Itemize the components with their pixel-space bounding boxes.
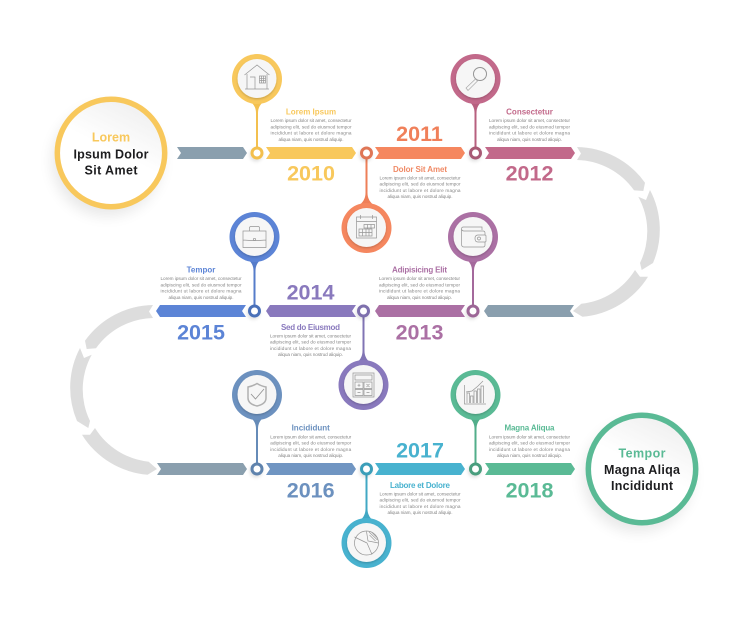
text block: adipiscing elit, sed do eiusmod tempor xyxy=(380,498,461,503)
bar 2017 xyxy=(375,463,465,475)
text block: incididunt ut labore et dolore magna xyxy=(380,504,461,509)
text block: Lorem ipsum dolor sit amet, consectetur xyxy=(489,434,570,439)
text block xyxy=(380,175,461,199)
text block xyxy=(270,434,352,458)
text block xyxy=(270,118,352,142)
text block: Lorem ipsum dolor sit amet, consectetur xyxy=(380,175,461,180)
text block: aliqua niam, quis nostrud aliquip. xyxy=(388,194,452,199)
start gray arrow bar xyxy=(177,147,247,159)
year: 2011 xyxy=(396,122,443,146)
milestone 2013 xyxy=(375,212,498,344)
node 2018 xyxy=(470,464,480,474)
start circle: Ipsum Dolor xyxy=(74,147,149,161)
bar 2010 xyxy=(266,147,356,159)
year: 2017 xyxy=(396,438,444,462)
milestone 2018 xyxy=(450,370,575,502)
text block: adipiscing elit, sed do eiusmod tempor xyxy=(270,441,352,446)
pin 2017 xyxy=(342,518,392,568)
text block: incididunt ut labore et dolore magna xyxy=(270,346,351,351)
stem 2018 xyxy=(468,417,483,463)
text block: incididunt ut labore et dolore magna xyxy=(379,288,460,294)
pin 2018 xyxy=(450,370,500,420)
year: 2014 xyxy=(287,280,334,304)
title: Labore et Dolore xyxy=(390,481,451,490)
year: 2012 xyxy=(506,162,553,186)
node 2011 xyxy=(362,148,372,158)
text block: aliqua niam, quis nostrud aliquip. xyxy=(388,510,452,515)
node 2012 xyxy=(470,148,480,158)
title: Dolor Sit Amet xyxy=(393,165,447,174)
icon: magnifier xyxy=(466,68,486,90)
milestone 2016 xyxy=(232,370,356,502)
bar 2018 xyxy=(485,463,575,475)
text block: aliqua niam, quis nostrud aliquip. xyxy=(278,352,343,357)
text block: incididunt ut labore et dolore magna xyxy=(270,130,352,136)
icon: shield xyxy=(248,384,266,406)
icon: house xyxy=(244,65,270,89)
title: Sed do Eiusmod xyxy=(281,323,340,332)
left connector arrows xyxy=(70,305,157,475)
pin 2016 xyxy=(232,370,282,420)
title: Adipisicing Elit xyxy=(392,266,447,274)
text block: Lorem ipsum dolor sit amet, consectetur xyxy=(380,491,461,496)
milestone 2012 xyxy=(450,54,575,186)
text block: adipiscing elit, sed do eiusmod tempor xyxy=(270,124,352,129)
start circle: Sit Amet xyxy=(84,163,138,177)
milestone 2015 xyxy=(156,212,280,344)
year: 2010 xyxy=(287,162,335,186)
start circle: Lorem xyxy=(92,131,130,145)
text block: incididunt ut labore et dolore magna xyxy=(380,188,461,193)
text block: adipiscing elit, sed do eiusmod tempor xyxy=(379,282,460,287)
return gray arrow bar xyxy=(484,305,574,317)
bar 2016 xyxy=(266,463,356,475)
title: Tempor xyxy=(187,266,215,274)
text block: Lorem ipsum dolor sit amet, consectetur xyxy=(270,333,351,338)
node 2017 xyxy=(362,464,372,474)
stem 2014 xyxy=(355,317,372,364)
text block: Lorem ipsum dolor sit amet, consectetur xyxy=(379,276,460,281)
title: Consectetur xyxy=(506,108,553,117)
node 2016 xyxy=(252,464,262,474)
lower gray arrow bar xyxy=(157,463,247,475)
icon: pie chart xyxy=(354,531,378,555)
stem 2010 xyxy=(249,101,265,147)
text block: aliqua niam, quis nostrud aliquip. xyxy=(278,137,344,142)
text block xyxy=(270,333,351,357)
pin 2011 xyxy=(342,203,392,253)
node 2010 xyxy=(252,148,262,158)
text block: Lorem ipsum dolor sit amet, consectetur xyxy=(270,434,352,439)
end circle: Tempor xyxy=(618,447,666,461)
stem 2012 xyxy=(468,101,483,147)
text block: Lorem ipsum dolor sit amet, consectetur xyxy=(160,276,242,281)
text block: adipiscing elit, sed do eiusmod tempor xyxy=(489,124,570,129)
text block xyxy=(160,276,242,300)
stem 2013 xyxy=(466,259,480,305)
end circle: Incididunt xyxy=(611,479,674,493)
node 2015 xyxy=(250,306,260,316)
year: 2016 xyxy=(287,478,335,502)
year: 2015 xyxy=(177,320,225,344)
end circle: Magna Aliqa xyxy=(604,463,681,477)
stem 2015 xyxy=(247,259,262,305)
bar 2011 xyxy=(375,147,465,159)
right connector arrows xyxy=(573,147,660,317)
title: Magna Aliqua xyxy=(504,424,555,432)
text block: incididunt ut labore et dolore magna xyxy=(160,288,242,294)
bar 2012 xyxy=(485,147,575,159)
text block xyxy=(380,491,461,515)
text block: adipiscing elit, sed do eiusmod tempor xyxy=(380,182,461,187)
title: Incididunt xyxy=(292,424,330,432)
text block xyxy=(379,276,460,300)
start circle xyxy=(52,99,165,216)
bar 2015 xyxy=(156,305,246,317)
text block: adipiscing elit, sed do eiusmod tempor xyxy=(489,441,570,446)
bar 2014 xyxy=(266,305,356,317)
text block: aliqua niam, quis nostrud aliquip. xyxy=(278,453,343,458)
text block: incididunt ut labore et dolore magna xyxy=(270,447,352,452)
milestone 2010 xyxy=(232,54,356,186)
stem 2016 xyxy=(250,417,264,463)
text block: Lorem ipsum dolor sit amet, consectetur xyxy=(489,118,570,123)
text block xyxy=(489,434,570,458)
icon: bar chart xyxy=(464,381,486,404)
pin 2015 xyxy=(230,212,280,262)
pin 2010 xyxy=(232,54,282,104)
year: 2018 xyxy=(506,478,553,502)
milestone 2017 xyxy=(342,438,465,568)
text block: aliqua niam, quis nostrud aliquip. xyxy=(168,295,234,300)
text block: Lorem ipsum dolor sit amet, consectetur xyxy=(270,118,352,123)
pin 2014 xyxy=(338,360,388,410)
end circle xyxy=(583,415,696,532)
text block xyxy=(489,118,570,142)
pin 2012 xyxy=(450,54,500,104)
milestone 2011 xyxy=(342,122,465,253)
icon: calculator xyxy=(353,373,374,397)
icon: briefcase xyxy=(243,226,266,248)
stem 2017 xyxy=(358,475,375,522)
stem 2011 xyxy=(358,159,375,206)
node 2013 xyxy=(468,306,478,316)
year: 2013 xyxy=(396,320,443,344)
text block: adipiscing elit, sed do eiusmod tempor xyxy=(270,340,351,345)
icon: calendar xyxy=(356,215,376,238)
text block: incididunt ut labore et dolore magna xyxy=(489,130,570,136)
node 2014 xyxy=(358,306,368,316)
text block: adipiscing elit, sed do eiusmod tempor xyxy=(160,282,242,287)
milestone 2014 xyxy=(266,280,388,410)
title: Lorem Ipsum xyxy=(286,108,336,117)
text block: aliqua niam, quis nostrud aliquip. xyxy=(497,137,562,142)
pin 2013 xyxy=(448,212,498,262)
icon: wallet xyxy=(462,227,486,247)
bar 2013 xyxy=(375,305,465,317)
text block: aliqua niam, quis nostrud aliquip. xyxy=(387,295,452,300)
text block: incididunt ut labore et dolore magna xyxy=(489,447,570,452)
text block: aliqua niam, quis nostrud aliquip. xyxy=(497,453,562,458)
